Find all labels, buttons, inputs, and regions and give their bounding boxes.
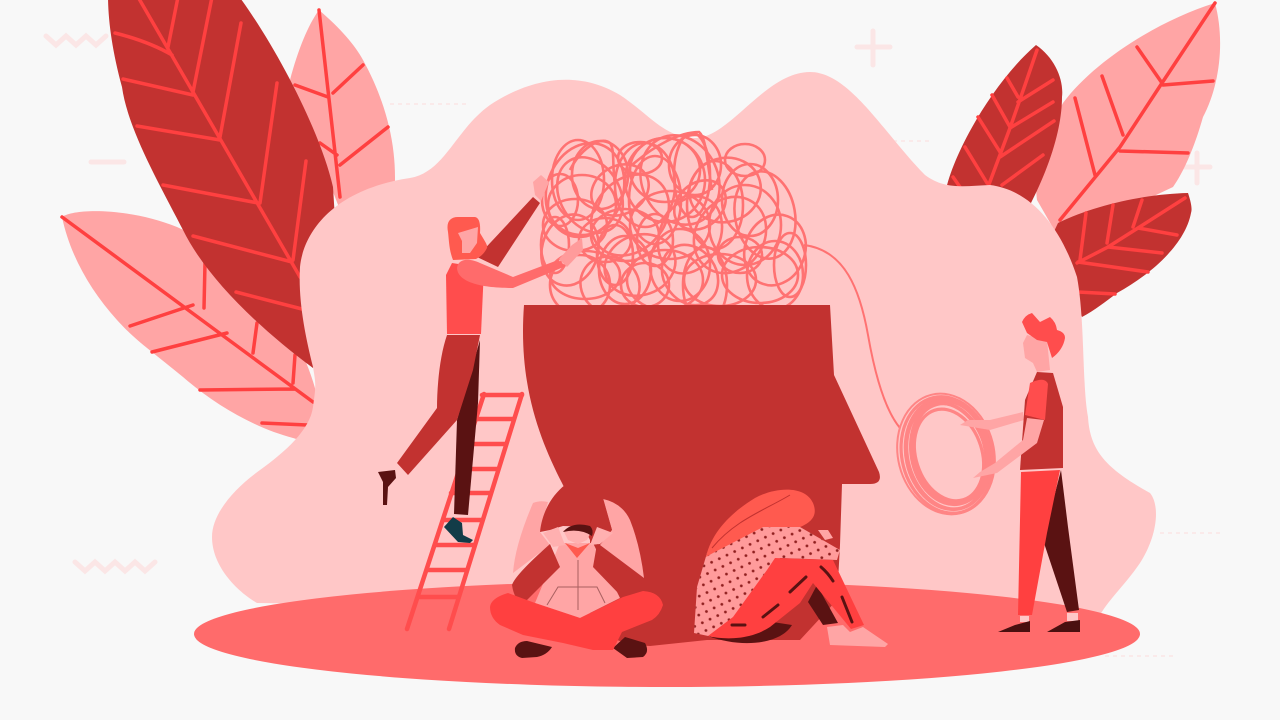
hair bbox=[447, 217, 487, 260]
person: man holding coil bbox=[960, 313, 1080, 632]
shoes bbox=[998, 620, 1080, 632]
jacket seams bbox=[547, 560, 605, 610]
neck and head bbox=[1023, 335, 1050, 372]
hair bbox=[706, 490, 815, 557]
head silhouette bbox=[523, 305, 880, 646]
person: sitting woman bbox=[694, 490, 888, 647]
background blob bbox=[212, 72, 1156, 615]
right shoe bbox=[444, 517, 473, 543]
person: woman on ladder bbox=[378, 175, 583, 543]
hair bbox=[563, 524, 593, 536]
back shin bbox=[808, 585, 838, 625]
leaf: pink lower left bbox=[62, 211, 318, 445]
left shoe bbox=[378, 470, 396, 505]
collar bbox=[565, 543, 590, 558]
leaf: dark lower right bbox=[1050, 193, 1192, 317]
front leg bbox=[1018, 470, 1060, 615]
underside bbox=[708, 620, 792, 643]
leaf: large pink top right bbox=[1036, 3, 1220, 240]
leaf: dark top right bbox=[945, 45, 1062, 205]
front arm with hand bbox=[973, 418, 1044, 478]
hair strand bbox=[712, 495, 790, 548]
jacket back sleeves bbox=[513, 499, 644, 578]
person: seated man with hood bbox=[490, 485, 663, 658]
pants stitches bbox=[732, 567, 852, 625]
ladder bbox=[407, 394, 522, 629]
background decorations bbox=[46, 31, 1222, 656]
shoes bbox=[515, 637, 647, 658]
back arm bbox=[960, 412, 1024, 430]
hair bbox=[1022, 313, 1065, 358]
socks bbox=[1020, 613, 1078, 622]
tangled scribble bbox=[540, 130, 808, 305]
dark back leg bbox=[1043, 470, 1079, 612]
sweater base bbox=[694, 527, 840, 637]
sweater dots bbox=[694, 527, 840, 637]
hood bbox=[540, 485, 612, 532]
pants bbox=[708, 558, 864, 638]
back arm bbox=[477, 197, 540, 267]
leaf: small pink top left bbox=[290, 10, 395, 210]
leaf: large dark top left bbox=[108, 0, 340, 368]
crossed legs bbox=[490, 591, 663, 650]
chest bbox=[535, 543, 620, 618]
front arm bbox=[457, 260, 566, 288]
coil of thread bbox=[885, 383, 1007, 525]
vest bbox=[1020, 372, 1063, 470]
ground ellipse bbox=[194, 581, 1140, 687]
sleeve bbox=[1025, 380, 1048, 420]
arms bbox=[512, 544, 643, 601]
back leg bbox=[454, 340, 480, 515]
feet bbox=[827, 625, 888, 647]
face and hands bbox=[543, 527, 613, 547]
torso bbox=[446, 263, 484, 334]
reaching hand bbox=[559, 238, 583, 267]
face bbox=[458, 227, 478, 253]
raised hand bbox=[533, 175, 549, 201]
thread to coil bbox=[804, 245, 900, 428]
hand on knee bbox=[818, 530, 833, 540]
front leg bbox=[397, 335, 480, 475]
